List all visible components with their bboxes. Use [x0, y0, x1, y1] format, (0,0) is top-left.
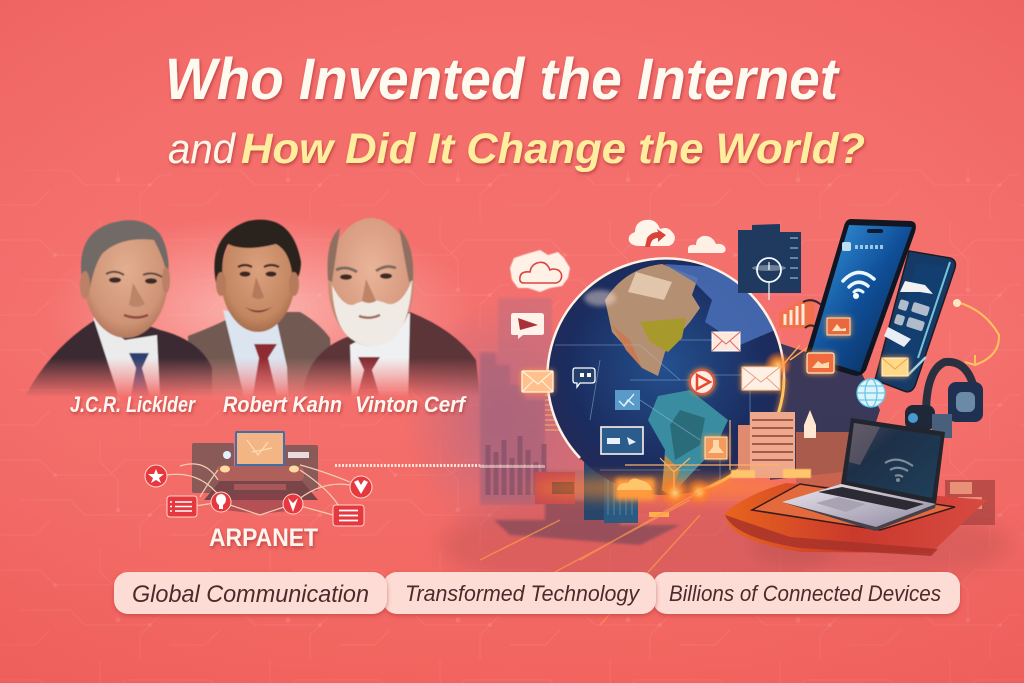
title line 2: How Did It Change the World? — [241, 125, 865, 173]
name labels — [70, 392, 467, 417]
portraits — [26, 218, 480, 400]
portrait: J.C.R. Licklider — [26, 220, 212, 400]
icon: video message — [511, 313, 544, 339]
icon: blue mail — [615, 390, 640, 410]
feature pills — [114, 572, 960, 614]
laptop platform — [725, 483, 987, 556]
icon: outlined cloud — [510, 250, 570, 292]
machine — [192, 431, 318, 514]
name: Vinton Cerf: Vinton Cerf — [355, 392, 467, 417]
icon: yellow mail — [882, 358, 908, 376]
icon: book tile — [807, 353, 834, 373]
pill: Billions of Connected Devices: Billions of Connected Devices — [669, 581, 941, 606]
wifi symbol — [843, 272, 874, 292]
globe outline — [630, 258, 784, 377]
icon: check node — [283, 494, 303, 514]
curved orange arrow — [957, 302, 999, 365]
ARPANET connection line — [335, 464, 545, 467]
icon: cloud with arrow — [629, 220, 675, 247]
icon: bar chart tag — [779, 300, 826, 330]
floating icons — [510, 220, 826, 459]
buildings in front of globe — [738, 410, 995, 525]
pill: Transformed Technology: Transformed Technology — [405, 581, 641, 606]
icon: heart node — [350, 476, 372, 498]
name: J.C.R. Licklider: J.C.R. Licklder — [70, 392, 196, 417]
dark panel behind devices — [770, 340, 880, 480]
title — [165, 47, 865, 173]
north america — [605, 264, 700, 376]
icon: card — [601, 427, 643, 454]
globe — [547, 258, 784, 495]
icon: globe — [857, 379, 885, 407]
pill: Global Communication: Global Communication — [132, 581, 369, 608]
pill: Global Communication — [114, 572, 387, 614]
ARPANET label: ARPANET — [209, 524, 318, 552]
icon: large mail — [742, 367, 780, 390]
cityscape — [480, 298, 680, 545]
portrait: Robert Kahn — [188, 220, 335, 400]
icon: white mail — [712, 332, 740, 351]
title line 1: Who Invented the Internet — [165, 47, 841, 112]
front phone — [805, 219, 916, 376]
back phone — [875, 251, 955, 392]
icon: star node — [145, 465, 167, 487]
icon: chat bubble — [573, 368, 595, 387]
pill: Billions of Connected Devices — [653, 572, 960, 614]
icon: picture tile on phone — [827, 318, 850, 335]
icon: small cloud — [688, 236, 726, 253]
pill: Transformed Technology — [383, 572, 656, 614]
icon: smartwatch headset — [905, 362, 983, 438]
name: Robert Kahn: Robert Kahn — [223, 392, 342, 417]
icon: data tower with clock — [738, 224, 801, 300]
icon: play button — [690, 370, 714, 394]
glowing ground lights — [480, 335, 825, 625]
network links — [167, 464, 350, 515]
ARPANET diagram — [145, 431, 372, 552]
icon: menu node — [333, 505, 364, 526]
icon: list node — [167, 496, 197, 517]
laptop — [782, 418, 945, 531]
icon: stamp tile — [705, 437, 727, 459]
icon: bulb node — [211, 492, 231, 512]
portrait: Vinton Cerf — [303, 218, 480, 400]
device cluster — [725, 219, 999, 556]
icon: mail left — [522, 371, 553, 392]
title line 2: and — [168, 125, 237, 172]
